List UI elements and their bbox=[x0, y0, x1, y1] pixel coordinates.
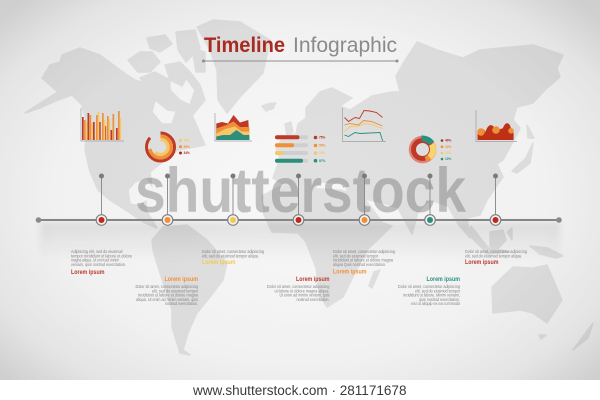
chart: segmented donut bbox=[408, 135, 452, 164]
bars legend: 87% bbox=[319, 159, 326, 163]
node 1 bbox=[96, 215, 107, 225]
text block 4: Ut enim ad minim veniam, quis bbox=[280, 293, 330, 298]
bars legend: 55% bbox=[319, 144, 326, 148]
donut legend: 50% bbox=[184, 145, 190, 149]
text block 7: Lorem ipsum bbox=[465, 260, 498, 266]
node 6 bbox=[425, 215, 435, 225]
node 4 bbox=[293, 215, 304, 225]
text block 6: nisi ut aliquip ex ea commodo bbox=[411, 301, 461, 306]
bars legend: 25% bbox=[319, 151, 326, 155]
text block 2 bbox=[136, 277, 199, 306]
text block 1: veniam, quis nostrud exercitation. bbox=[71, 262, 126, 267]
text block 5 bbox=[333, 249, 396, 276]
text block 3 bbox=[202, 249, 265, 266]
title text: Timeline: Timeline bbox=[204, 34, 285, 57]
segmented donut legend bbox=[441, 139, 452, 161]
text block 1: Adipiscing elit, sed do eiusmod bbox=[71, 249, 123, 254]
text block 6: elit, sed do eiusmod tempor bbox=[415, 288, 460, 293]
chart: line chart bbox=[342, 108, 386, 142]
node 5 bbox=[359, 215, 370, 225]
text block 4: Dolor sit amet, consectetur adipiscing bbox=[267, 284, 330, 289]
text block 4: Lorem ipsum bbox=[296, 277, 330, 283]
segmented donut legend: 12% bbox=[445, 151, 452, 155]
chart: stacked area bbox=[215, 113, 252, 141]
text block 4 bbox=[267, 277, 330, 302]
text block 6: incididunt ut labore. Minim veniam, bbox=[403, 293, 460, 298]
text block 2: aliqua. Ut enim ad minim veniam, quis bbox=[136, 297, 198, 302]
text block 4: nostrud exercitation. bbox=[296, 297, 330, 302]
text block 2: Dolor sit amet, consectetur adipiscing bbox=[136, 284, 199, 289]
segmented donut legend: 10% bbox=[445, 157, 452, 161]
chart: bar chart bbox=[81, 108, 124, 141]
text block 2: elit, sed do eiusmod tempor bbox=[152, 288, 198, 293]
text block 5: incididunt ut labore et dolore magna bbox=[333, 258, 394, 263]
watermark: shutterstock bbox=[135, 156, 467, 226]
timeline axis bbox=[36, 174, 562, 225]
text block 7: elit, sed do eiusmod tempor aliqua. bbox=[465, 253, 522, 258]
chart: horizontal progress bars bbox=[275, 135, 326, 163]
text block 1 bbox=[71, 249, 133, 276]
title bbox=[202, 34, 398, 62]
chart: radial donut bbox=[146, 133, 190, 161]
donut legend: 34% bbox=[184, 151, 190, 155]
text block 6: quis nostrud exercitation, bbox=[419, 297, 460, 302]
bars legend bbox=[314, 136, 326, 163]
title rule bbox=[202, 60, 398, 62]
text block 1: Lorem ipsum bbox=[71, 270, 104, 276]
text block 1: tempor incididunt ut labore et dolore bbox=[71, 253, 133, 258]
text block 5: aliqua Quis nostrud exercitation. bbox=[333, 262, 386, 267]
segmented donut legend: 10% bbox=[445, 145, 452, 149]
text block 6 bbox=[398, 277, 461, 306]
text block 6: Dolor sit amet, consectetur adipiscing bbox=[398, 284, 461, 289]
text block 1: magna aliqua. Ut enim ad minim bbox=[71, 258, 119, 263]
donut legend: 75% bbox=[184, 139, 190, 143]
node 3 bbox=[228, 215, 238, 225]
footer band bbox=[0, 380, 600, 400]
text block 2: nostrud exercitation. bbox=[165, 301, 198, 306]
text block 5: elit, sed do eiusmod tempor bbox=[333, 253, 378, 258]
text block 3: Dolor sit amet, consectetur adipiscing bbox=[202, 249, 265, 254]
text block 3: elit, sed do eiusmod tempor aliqua. bbox=[202, 253, 259, 258]
text block 7: Dolor sit amet, consectetur adipiscing bbox=[465, 249, 528, 254]
text block 7 bbox=[465, 249, 528, 266]
world map bbox=[25, 20, 593, 355]
bars legend: 75% bbox=[319, 136, 326, 140]
text block 5: Dolor sit amet, consectetur adipiscing bbox=[333, 249, 396, 254]
footer credit: www.shutterstock.com · 281171678 bbox=[192, 383, 406, 398]
chart: bump area bbox=[476, 110, 517, 142]
donut legend bbox=[179, 139, 190, 155]
text block 4: ut labore et dolore magna aliqua. bbox=[274, 288, 330, 293]
title text: Infographic: Infographic bbox=[293, 34, 397, 57]
timeline shadow bbox=[40, 222, 560, 262]
text block 5: Lorem ipsum bbox=[333, 270, 366, 276]
node 7 bbox=[490, 215, 501, 225]
text block 3: Lorem ipsum bbox=[202, 260, 236, 266]
segmented donut legend: 40% bbox=[445, 139, 452, 143]
text block 6: Lorem ipsum bbox=[426, 277, 460, 283]
node 2 bbox=[162, 215, 173, 225]
text block 2: incididunt ut labore et dolore magna bbox=[138, 293, 199, 298]
text block 2: Lorem ipsum bbox=[164, 277, 198, 283]
